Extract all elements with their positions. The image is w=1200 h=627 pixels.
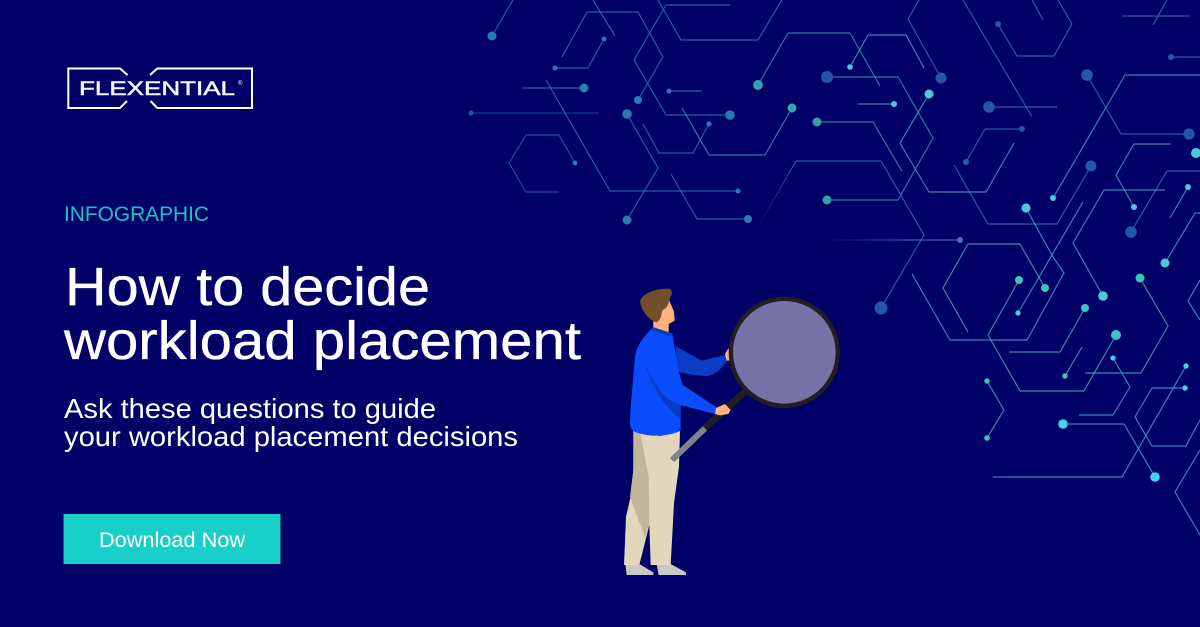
title: How to decide [65, 257, 430, 317]
far arm [675, 346, 727, 376]
magnifying glass lens [731, 299, 838, 406]
hair [640, 289, 672, 322]
trouser shading [630, 431, 649, 537]
sweater [630, 329, 717, 436]
button: Download Now: Download Now [99, 528, 245, 552]
collar [651, 327, 673, 336]
button: Download Now [64, 514, 280, 564]
subtitle: Ask these questions to guide [64, 393, 436, 424]
magnifying glass handle [704, 392, 745, 429]
sweater shading [645, 363, 681, 419]
background circuit network [468, 0, 1200, 535]
title [63, 257, 581, 371]
subtitle [64, 393, 518, 452]
subtitle: your workload placement decisions [64, 421, 518, 452]
neck and face [653, 298, 675, 333]
far hand [725, 348, 731, 361]
trousers [624, 431, 680, 565]
logo: Flexential: FLEXENTIAL [79, 78, 235, 100]
shoes [625, 564, 686, 575]
title: workload placement [63, 311, 581, 371]
near hand [715, 404, 731, 415]
eyebrow label: INFOGRAPHIC [64, 202, 209, 226]
logo: Flexential: ® [238, 80, 243, 87]
illustration: person with magnifying glass [624, 289, 838, 575]
logo: Flexential [68, 68, 252, 108]
